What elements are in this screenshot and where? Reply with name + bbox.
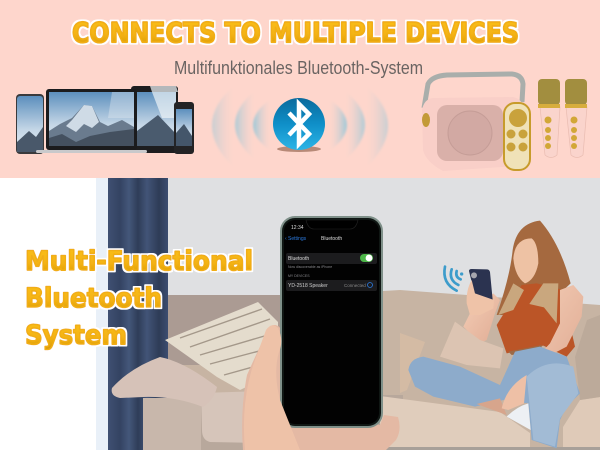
- bare ankle: [477, 398, 507, 415]
- belt: [508, 345, 542, 355]
- bluetooth toggle row: Bluetooth: [288, 256, 309, 262]
- cushion: [440, 322, 503, 368]
- phone mockup: [280, 216, 383, 428]
- heading line: Bluetooth: Bluetooth: [25, 283, 162, 314]
- thumb over phone: [244, 325, 300, 450]
- right seat cushion: [563, 397, 600, 448]
- panel: pink header background: [0, 0, 600, 178]
- phone nav bar: Bluetooth: [321, 236, 342, 242]
- her right arm: [528, 285, 583, 367]
- phone caption text: MY DEVICES: [288, 274, 310, 278]
- phone notch and status bar: 12:34: [291, 225, 304, 231]
- panel: living room photo: [0, 178, 600, 450]
- icon: wifi signal: [444, 267, 463, 291]
- front leg highlight: [527, 363, 578, 447]
- icon: karaoke speaker: [422, 74, 530, 171]
- icon: bluetooth ball: [273, 98, 325, 152]
- heading line: Multi-Functional: Multi-Functional: [25, 246, 253, 277]
- icon: signal waves right: [328, 84, 388, 170]
- striped pillow: [165, 302, 278, 390]
- connected device row: YD-2518 Speaker: [288, 283, 328, 289]
- sofa base strip: [380, 447, 600, 450]
- held phone: [469, 269, 493, 307]
- subtitle: Multifunktionales Bluetooth-System: [174, 58, 423, 78]
- phone caption text: [288, 265, 332, 278]
- hand palm behind phone: [242, 325, 400, 450]
- left side pillow: [400, 333, 425, 393]
- sofa front: [143, 398, 201, 450]
- sofa cushion: [201, 391, 262, 443]
- sofa arm: [112, 357, 217, 407]
- icon: phone: [16, 94, 44, 154]
- sock: [507, 403, 531, 430]
- icon: small phone: [174, 102, 194, 154]
- orange top: [497, 283, 575, 357]
- phone caption text: Now discoverable as iPhone: [288, 265, 332, 269]
- blonde hair strands: [498, 283, 558, 323]
- side heading: [25, 246, 253, 351]
- phone nav bar: [285, 236, 342, 242]
- curtain: [108, 178, 168, 450]
- icon: laptop: [36, 89, 147, 153]
- sofa back: [165, 290, 600, 450]
- phone notch and status bar: [291, 220, 358, 231]
- title: CONNECTS TO MULTIPLE DEVICES: [72, 16, 519, 49]
- hand holding phone: [467, 280, 494, 315]
- jeans: [408, 347, 580, 448]
- her left arm: [463, 293, 500, 343]
- bluetooth toggle row: [286, 253, 377, 264]
- connected device row: [286, 280, 377, 291]
- hand on leg: [502, 375, 527, 410]
- icon: tablet: [131, 86, 178, 153]
- icon: group of devices: [16, 86, 194, 154]
- phone nav bar: ‹ Settings: [285, 236, 307, 242]
- right back pillow: [575, 315, 600, 400]
- heading line: System: System: [25, 320, 127, 351]
- seat cushion under woman: [380, 396, 530, 447]
- face: [513, 238, 538, 283]
- icon: microphone right: [565, 79, 587, 158]
- hair back: [497, 221, 571, 323]
- icon: microphone left: [538, 79, 560, 158]
- icon: signal waves left: [212, 84, 272, 170]
- connected device row: Connected: [344, 283, 366, 288]
- woman on sofa: [408, 221, 583, 448]
